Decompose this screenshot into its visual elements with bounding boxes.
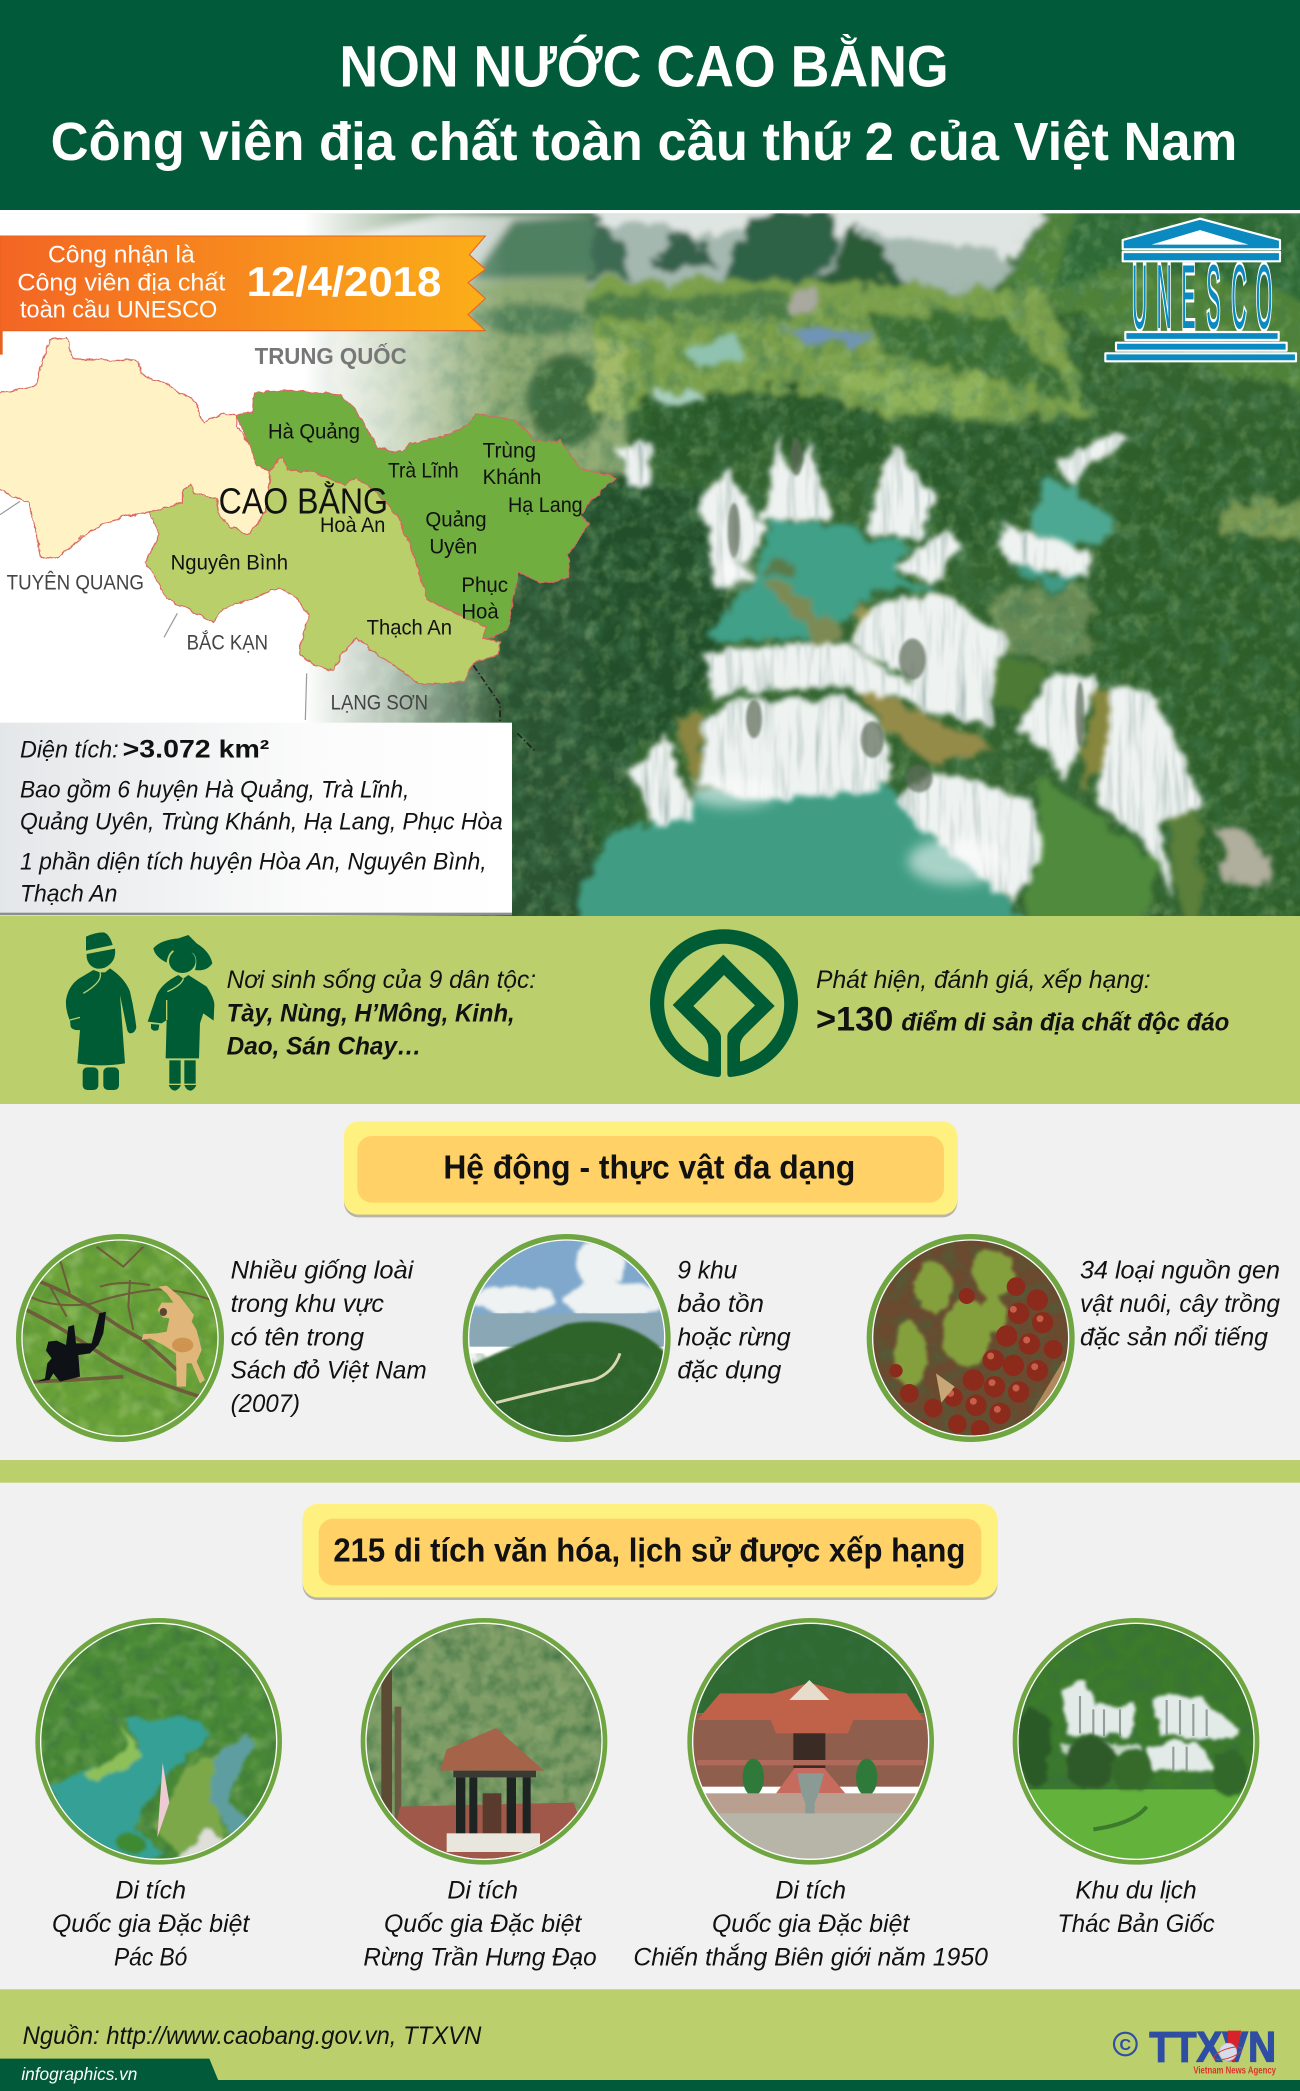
white fade over left side of photo	[0, 213, 507, 916]
panel heading: flora and fauna: Hệ động - thực vật đa dạng	[443, 1150, 855, 1187]
text: conservation zones: hoặc rừng	[677, 1323, 791, 1351]
footer band	[0, 1989, 1300, 2091]
text: genetic resources	[1080, 1257, 1280, 1351]
caption: Tran Hung Dao forest	[363, 1877, 597, 1971]
info box: area and districts	[0, 723, 512, 915]
green band: ethnic groups and heritage sites: Dao, Sán Chay…	[227, 1033, 421, 1061]
text: conservation zones: đặc dụng	[677, 1357, 781, 1385]
full districts	[236, 390, 616, 638]
rock shading inside the falls	[728, 439, 1084, 792]
UNESCO logo	[1105, 219, 1296, 361]
panel heading: relics	[303, 1504, 997, 1600]
header band with title	[0, 0, 1300, 214]
green band: ethnic groups and heritage sites: Tày, Nùng, H’Mông, Kinh,	[227, 999, 515, 1027]
heritage sites text: Phát hiện, đánh giá, xếp hạng:	[816, 966, 1151, 994]
orange ribbon with date: Công viên địa chất	[17, 270, 226, 297]
neighbouring area	[0, 338, 270, 558]
map of Cao Bang province: Uyên	[429, 534, 477, 558]
text: genetic resources: 34 loại nguồn gen	[1080, 1257, 1280, 1285]
map of Cao Bang province: Thạch An	[367, 616, 452, 640]
caption: Ban Gioc tourist area	[1057, 1877, 1215, 1938]
area: Diện tích:	[20, 736, 119, 763]
map of Cao Bang province: Quảng	[425, 508, 487, 532]
orange ribbon with date: toàn cầu UNESCO	[20, 296, 217, 323]
text: species: (2007)	[231, 1390, 300, 1418]
text: genetic resources: vật nuôi, cây trồng	[1080, 1290, 1280, 1318]
caption: Tran Hung Dao forest: Quốc gia Đặc biệt	[384, 1910, 582, 1938]
province name: CAO BẰNG	[219, 480, 388, 521]
green divider band	[0, 1460, 1300, 1483]
map of Cao Bang province: Khánh	[483, 465, 541, 489]
photo circle: forest hills	[463, 1234, 671, 1442]
border dashes	[473, 665, 535, 751]
ribbon text: Công nhận là	[48, 242, 195, 269]
text: conservation zones: 9 khu	[677, 1257, 737, 1285]
map of Cao Bang province: Hoà An	[320, 513, 385, 537]
logo: TTXVN: TTXVN	[1149, 2023, 1276, 2071]
caption: Tran Hung Dao forest: Rừng Trần Hưng Đạo	[363, 1943, 597, 1971]
map of Cao Bang province: Phục	[461, 573, 508, 597]
caption: border victory relic	[633, 1877, 988, 1971]
pediment	[1123, 219, 1280, 249]
text: species: trong khu vực	[231, 1290, 384, 1318]
info box: area and districts: >3.072 km²	[123, 735, 269, 763]
photo circle: gibbons	[16, 1234, 224, 1442]
caption: Pac Bo: Pác Bó	[114, 1943, 187, 1971]
district list: Bao gồm 6 huyện Hà Quảng, Trà Lĩnh,	[20, 776, 409, 803]
caption: Pac Bo: Quốc gia Đặc biệt	[52, 1910, 250, 1938]
panel heading: relics: 215 di tích văn hóa, lịch sử được xếp hạng	[333, 1532, 965, 1569]
mist on the water	[689, 558, 1006, 884]
map of Cao Bang province: TUYÊN QUANG	[7, 569, 144, 594]
aerial photo: Ban Gioc waterfalls drawn as shapes	[0, 200, 1300, 935]
photo circle: Ban Gioc tourist area	[1013, 1618, 1260, 1869]
map of Cao Bang province: Hạ Lang	[508, 493, 583, 517]
caption: Tran Hung Dao forest: Di tích	[447, 1877, 518, 1905]
text: species: Sách đỏ Việt Nam	[231, 1357, 427, 1385]
text: genetic resources: đặc sản nổi tiếng	[1080, 1323, 1268, 1351]
logo: TTXVN: C	[1120, 2037, 1132, 2054]
UNESCO letters: UNESCO	[1132, 245, 1272, 347]
map of Cao Bang province: LẠNG SƠN	[331, 690, 428, 714]
caption: border victory relic: Di tích	[775, 1877, 846, 1905]
logo: TTXVN	[1114, 2023, 1276, 2076]
caption: Pac Bo: Di tích	[115, 1877, 186, 1905]
waterfalls	[618, 436, 1203, 903]
foliage texture	[360, 213, 1300, 916]
text: conservation zones: bảo tồn	[677, 1290, 764, 1318]
caption: border victory relic: Chiến thắng Biên giới năm 1950	[633, 1942, 988, 1971]
panel heading: flora and fauna	[344, 1121, 957, 1217]
map of Cao Bang province: BẮC KẠN	[187, 629, 268, 654]
photo circle: Pac Bo	[35, 1618, 284, 1869]
logo: TTXVN: Vietnam News Agency	[1193, 2065, 1276, 2076]
caption: border victory relic: Quốc gia Đặc biệt	[712, 1910, 910, 1938]
photo circle: border victory relic	[687, 1618, 935, 1869]
country and province labels: TRUNG QUỐC	[255, 343, 407, 369]
text: species: Nhiều giống loài	[231, 1257, 415, 1285]
site name: infographics.vn	[21, 2064, 137, 2084]
info box: area and districts: Thạch An	[20, 880, 117, 907]
map of Cao Bang province: Nguyên Bình	[171, 550, 288, 574]
caption: Ban Gioc tourist area: Khu du lịch	[1075, 1877, 1197, 1905]
ethnic groups text: Nơi sinh sống của 9 dân tộc:	[227, 966, 536, 994]
caption: Ban Gioc tourist area: Thác Bản Giốc	[1057, 1910, 1215, 1938]
district labels: Hà Quảng	[268, 420, 360, 444]
info box: area and districts: Quảng Uyên, Trùng Khánh, Hạ Lang, Phục Hòa	[20, 808, 503, 835]
text: conservation zones	[677, 1257, 791, 1385]
partial districts	[145, 457, 502, 684]
icon: world heritage emblem	[650, 929, 798, 1077]
source: Nguồn: http://www.caobang.gov.vn, TTXVN	[23, 2022, 482, 2050]
orange ribbon with date	[0, 236, 485, 355]
caption: Pac Bo	[52, 1877, 250, 1971]
photo circle: chestnuts	[867, 1234, 1075, 1442]
title line 1: NON NƯỚC CAO BẰNG	[339, 34, 949, 100]
photo circle: Tran Hung Dao forest	[361, 1618, 609, 1867]
map of Cao Bang province: Trà Lĩnh	[388, 458, 459, 482]
map of Cao Bang province: Hoà	[461, 600, 499, 624]
map of Cao Bang province	[0, 338, 616, 751]
title line 2: Công viên địa chất toàn cầu thứ 2 của Việt Nam	[51, 113, 1237, 172]
map of Cao Bang province: Trùng	[483, 438, 536, 462]
text: species	[231, 1257, 427, 1418]
info box: area and districts: 1 phần diện tích huyện Hòa An, Nguyên Bình,	[20, 848, 487, 875]
date: 12/4/2018	[247, 259, 441, 305]
green band: ethnic groups and heritage sites: >130	[816, 1001, 893, 1039]
green band: ethnic groups and heritage sites	[0, 916, 1300, 1104]
icon: man and woman in traditional dress	[66, 932, 214, 1091]
green band: ethnic groups and heritage sites: điểm di sản địa chất độc đáo	[901, 1009, 1229, 1037]
text: species: có tên trong	[231, 1323, 364, 1351]
